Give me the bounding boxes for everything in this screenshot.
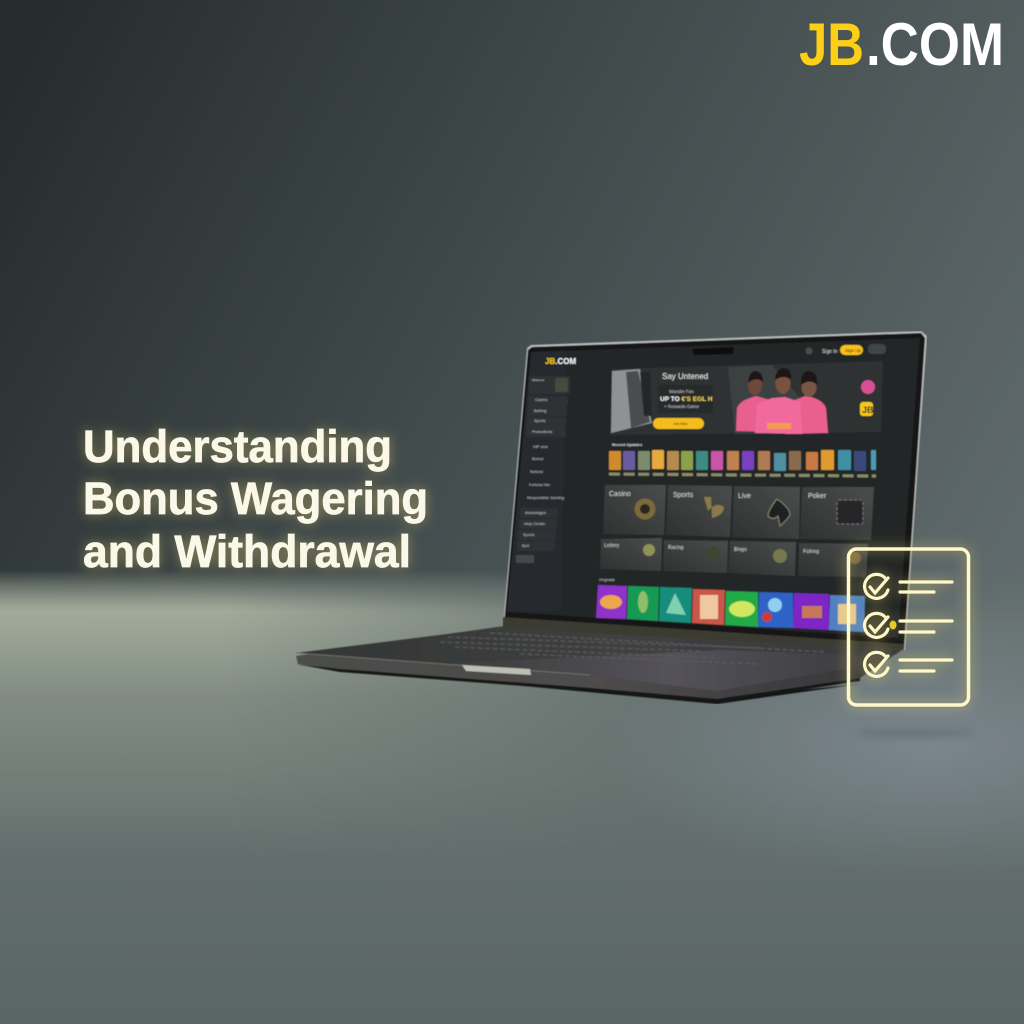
logo: JB.COM: .COM — [866, 11, 1004, 78]
sidebar: Casino — [535, 397, 548, 402]
screen — [507, 338, 920, 638]
hero banner: + Rewards Game — [664, 404, 700, 409]
top nav — [692, 344, 886, 355]
checklist icon — [848, 549, 968, 705]
category cards: Bingo — [734, 547, 747, 553]
sidebar: Sports — [534, 418, 546, 423]
sidebar: Sports — [523, 532, 535, 537]
category cards: Lottery — [604, 543, 620, 549]
checklist shadow — [855, 730, 975, 736]
category cards — [600, 485, 874, 577]
featured games — [596, 577, 865, 632]
games strip — [609, 442, 876, 476]
sidebar: Betting — [534, 408, 546, 413]
category cards: Racing — [668, 545, 684, 551]
hero banner: Join Now — [673, 422, 688, 426]
logo: JB.COM — [799, 11, 1004, 78]
category cards: Live — [738, 493, 751, 500]
sidebar: Promotions — [532, 429, 552, 434]
title: Bonus Wagering — [83, 473, 428, 524]
sidebar: Help Center — [524, 521, 546, 526]
trackpad notch — [462, 665, 531, 675]
title: and Withdrawal — [83, 526, 411, 577]
check items — [865, 574, 952, 676]
sidebar: Welcome — [532, 378, 545, 382]
players — [736, 368, 828, 434]
coin dot — [890, 620, 896, 630]
sidebar: BLK — [522, 543, 530, 548]
games strip: Recent Updates — [612, 442, 643, 447]
hero banner: Wander Fan — [669, 389, 694, 394]
laptop lid — [503, 331, 927, 650]
sidebar: JB.COM — [545, 357, 576, 366]
title: Understanding — [83, 421, 392, 472]
hero banner: JB — [862, 405, 874, 415]
logo: JB.COM: JB — [799, 11, 864, 78]
sidebar: Fortune Her — [529, 482, 551, 487]
keyboard — [440, 633, 825, 664]
laptop — [296, 331, 927, 704]
top nav: Sign Up — [845, 348, 862, 353]
sidebar: Advantages — [525, 510, 546, 515]
laptop shadow — [310, 666, 860, 704]
category cards: Sports — [673, 492, 694, 499]
hero banner: Say Untened — [662, 372, 708, 381]
featured games: Originals — [599, 577, 615, 582]
hero banner: UP TO €'S EGL H — [660, 396, 713, 403]
top nav: Sign In — [822, 349, 838, 355]
category cards: Casino — [609, 491, 631, 498]
category icons — [634, 497, 863, 564]
category cards: Poker — [808, 493, 827, 500]
sidebar: Bonus — [532, 456, 543, 461]
category cards: Fishing — [803, 549, 819, 555]
title — [83, 421, 428, 577]
laptop base — [296, 626, 905, 703]
sidebar: VIP club — [533, 444, 549, 449]
sidebar: Refund — [530, 469, 543, 474]
sidebar — [507, 351, 576, 612]
sidebar: Responsible Gaming — [527, 495, 564, 500]
hero banner — [610, 361, 883, 435]
